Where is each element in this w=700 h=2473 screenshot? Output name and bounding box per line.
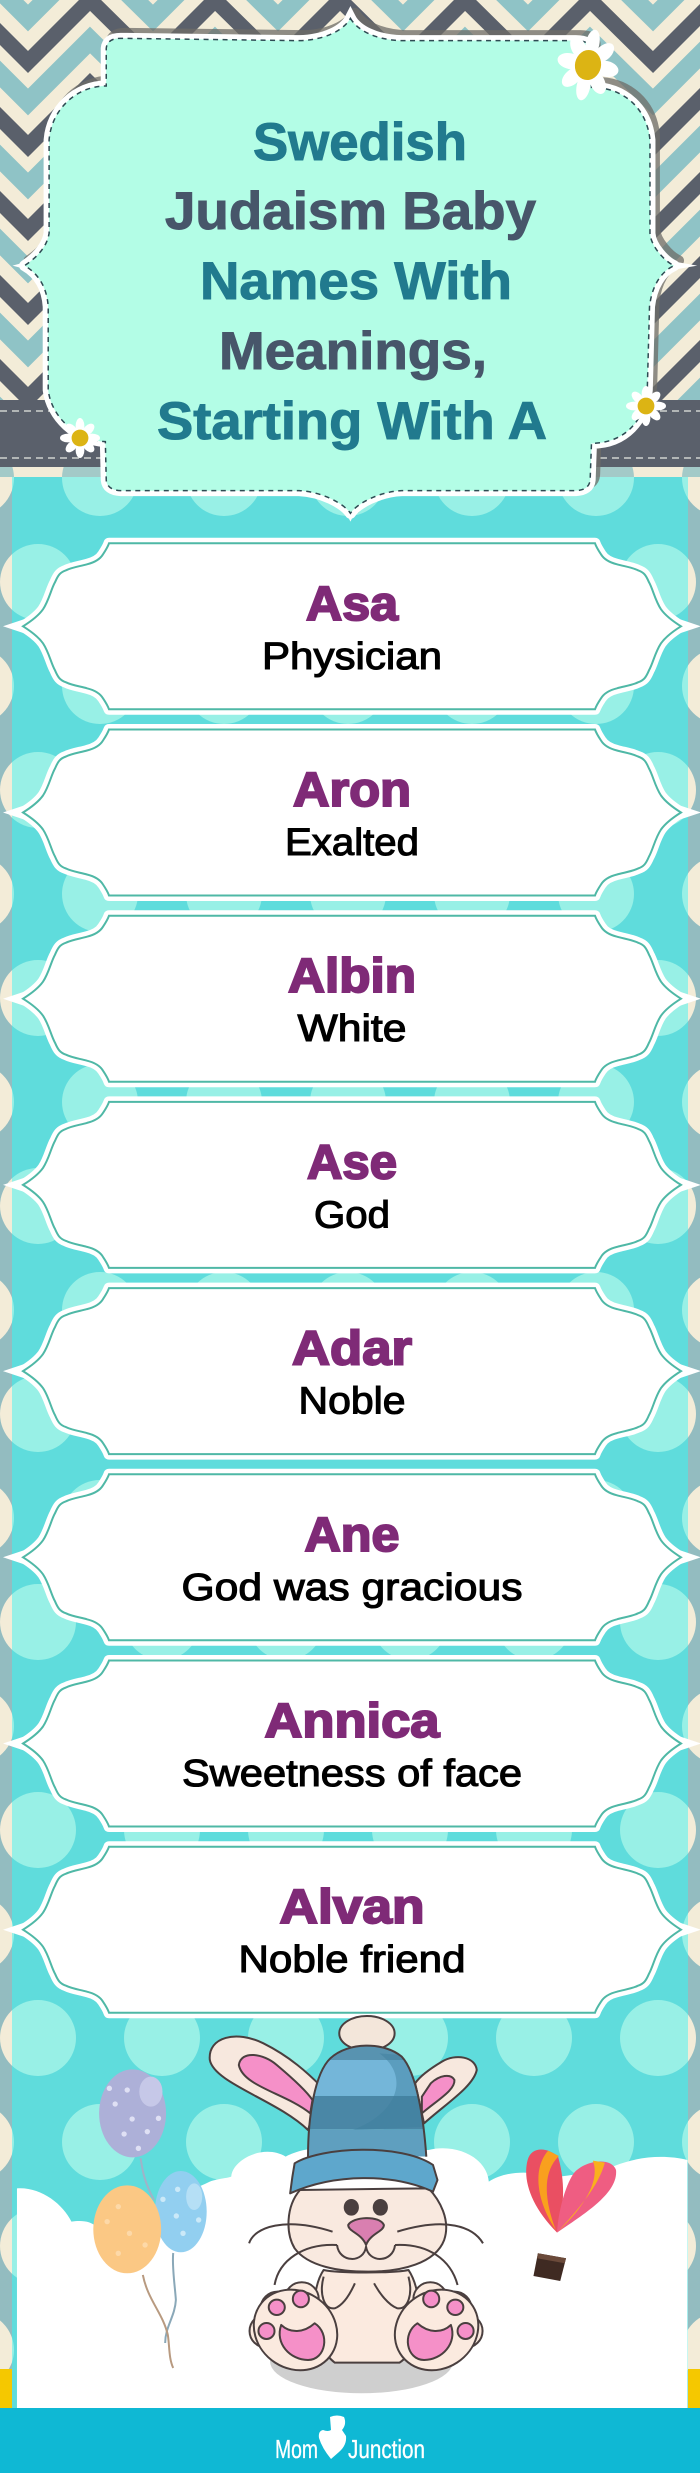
- card: Ane: [3, 1474, 700, 1640]
- card: Aron: Aron: [293, 764, 411, 817]
- dark stitched band: [0, 400, 700, 467]
- title: Swedish: [253, 113, 467, 172]
- title: Judaism Baby: [165, 182, 537, 241]
- card: Asa: Asa: [306, 578, 398, 631]
- illustration scene: [17, 2016, 687, 2408]
- card: Ase: [3, 1102, 700, 1268]
- card: Adar: Noble: [298, 1381, 406, 1423]
- card: Ase: Ase: [307, 1136, 397, 1189]
- footer bar: [0, 2408, 700, 2473]
- title: Starting With A: [157, 392, 547, 451]
- card: Albin: Albin: [288, 950, 416, 1003]
- logo icon: [319, 2416, 346, 2459]
- title plaque: [12, 6, 697, 522]
- polka dot background: [0, 440, 700, 2408]
- logo wordmark: Mom: [275, 2434, 318, 2464]
- card: Annica: Sweetness of face: [182, 1753, 522, 1795]
- logo wordmark: Junction: [348, 2434, 425, 2464]
- logo wordmark: [275, 2434, 425, 2464]
- yellow strip ends: [0, 2369, 700, 2408]
- chevron background: [0, 0, 700, 400]
- card: Albin: [3, 916, 700, 1082]
- bunny: [210, 2016, 488, 2393]
- flower bottom left: [60, 418, 100, 458]
- card: Annica: [3, 1660, 700, 1826]
- card: Adar: [3, 1288, 700, 1454]
- footer logo: [275, 2416, 425, 2464]
- card: Alvan: Noble friend: [238, 1939, 466, 1981]
- balloons: [93, 2069, 207, 2368]
- card: Alvan: Alvan: [280, 1881, 424, 1934]
- card: Asa: Physician: [262, 636, 442, 678]
- flower right: [626, 386, 666, 426]
- title: Meanings,: [219, 322, 487, 381]
- clouds: [17, 2148, 687, 2408]
- card: Aron: [3, 730, 700, 896]
- card: Adar: Adar: [292, 1323, 412, 1376]
- card: Ane: Ane: [304, 1509, 400, 1562]
- flower top right: [550, 23, 626, 107]
- card: Ase: God: [314, 1194, 390, 1236]
- card: Ane: God was gracious: [182, 1567, 522, 1609]
- card: Asa: [3, 543, 700, 709]
- title: [157, 113, 547, 451]
- card: Aron: Exalted: [285, 822, 419, 864]
- card: Albin: White: [298, 1008, 406, 1050]
- title: Names With: [200, 252, 512, 311]
- hot air balloon: [526, 2150, 616, 2281]
- card: Annica: Annica: [264, 1695, 440, 1748]
- card: Alvan: [3, 1847, 700, 2013]
